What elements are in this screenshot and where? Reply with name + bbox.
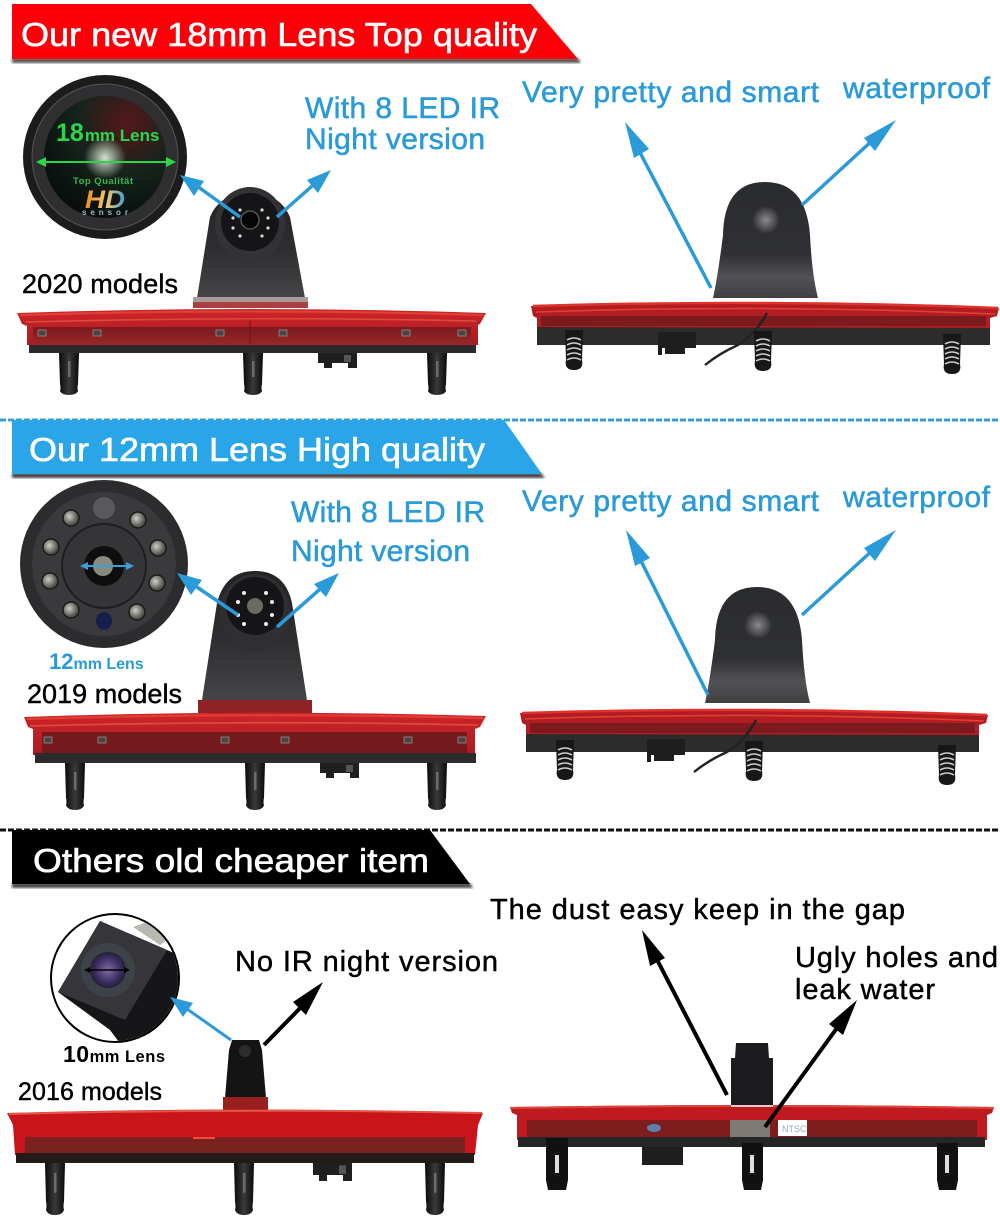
banner: old cheaper item: Others old cheaper item <box>33 842 429 879</box>
small camera stand <box>223 1040 268 1110</box>
section: 2016 product rear <box>510 1043 994 1190</box>
label: 10mm lens: 10mm Lens <box>63 1041 165 1067</box>
label: very pretty (middle): Very pretty and smart <box>522 485 820 518</box>
arrow: very pretty (middle) <box>626 530 708 695</box>
arrow: no IR label <box>264 982 323 1045</box>
section: 2019 product front <box>24 571 486 810</box>
lens inset: 18mm: 18mm Lens <box>56 119 159 147</box>
arrow: to LED label (middle) <box>277 573 339 627</box>
label: 2016 models: 2016 models <box>18 1078 162 1106</box>
label: 2019 models: 2019 models <box>27 679 182 709</box>
label: waterproof (top): waterproof <box>842 72 991 105</box>
arrow: to LED label <box>277 170 331 217</box>
label: no IR night version: No IR night version <box>235 946 498 978</box>
lens inset: 18mm: Top Qualität <box>73 176 134 187</box>
banner: 12mm lens <box>12 420 545 478</box>
arrow: waterproof (top) <box>802 120 896 205</box>
arrow: very pretty (top) <box>625 122 711 288</box>
label: night version (top): Night version <box>305 123 485 156</box>
label: night version (middle): Night version <box>291 535 470 568</box>
section: 2020 product rear <box>531 182 999 374</box>
label: ugly holes: Ugly holes and <box>795 942 998 974</box>
banner: 18mm lens: Our new 18mm Lens Top quality <box>21 16 538 53</box>
arrow: to 12mm inset <box>177 573 238 615</box>
label: with 8 LED IR (middle): With 8 LED IR <box>291 496 485 529</box>
lens inset: 18mm: sensor <box>82 208 128 217</box>
banner: 12mm lens: Our 12mm Lens High quality <box>29 431 486 468</box>
dashed divider: black <box>0 828 1000 832</box>
lens inset: 10mm <box>50 913 180 1043</box>
label: dust in the gap: The dust easy keep in the gap <box>490 894 905 926</box>
banner: 18mm lens <box>12 4 581 63</box>
banner: old cheaper item <box>12 830 473 888</box>
light bar <box>17 309 486 395</box>
arrow: dust <box>642 930 727 1095</box>
lens inset: 18mm <box>23 75 187 239</box>
label: very pretty (top): Very pretty and smart <box>522 76 820 109</box>
label: 12mm lens: 12mm Lens <box>49 649 144 674</box>
section: 2020 product front <box>17 187 486 395</box>
stand with camera <box>193 187 308 308</box>
label: leak water: leak water <box>795 974 935 1006</box>
stand with camera <box>198 571 312 713</box>
lens inset: 12mm <box>20 480 188 648</box>
label: with 8 LED IR (top): With 8 LED IR <box>305 92 500 125</box>
light bar <box>24 713 486 810</box>
arrow: holes <box>765 1000 857 1127</box>
label: 2020 models: 2020 models <box>22 269 178 299</box>
section: 2019 product rear <box>520 587 988 785</box>
label: waterproof (middle): waterproof <box>842 481 991 514</box>
section: 2016 product rear: NTSC <box>782 1124 807 1134</box>
dashed divider: blue <box>0 418 1000 422</box>
arrow: waterproof (middle) <box>802 530 896 615</box>
arrow: to 10mm inset <box>170 997 231 1040</box>
lens inset: 18mm: HD <box>85 186 125 214</box>
light bar <box>7 1110 483 1215</box>
arrow: to lens inset <box>180 175 240 217</box>
section: 2016 product front <box>7 1040 483 1215</box>
